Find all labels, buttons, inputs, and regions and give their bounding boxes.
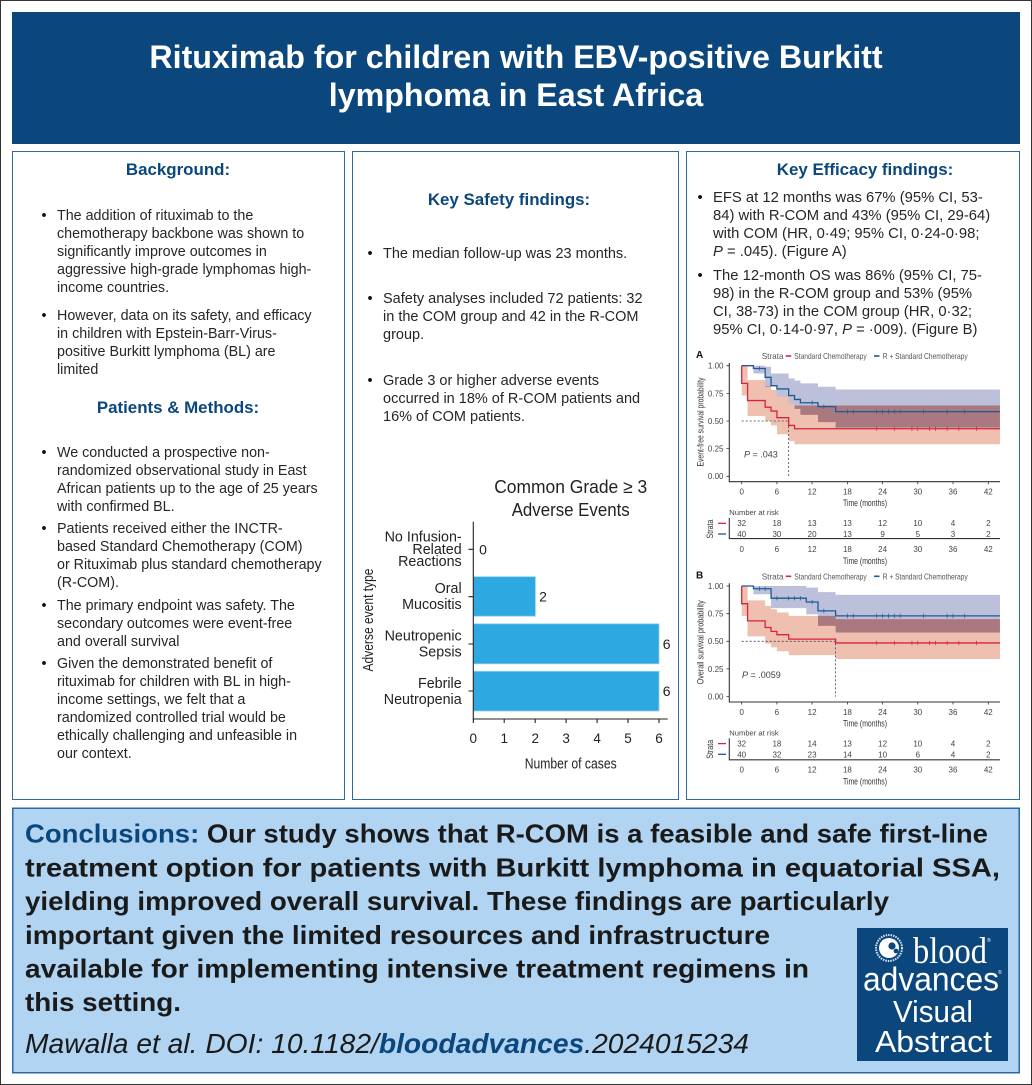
chart B: overall survival: 6: [775, 765, 780, 774]
chart A: event-free survival: [696, 350, 1000, 567]
text: efficacy bullet 1: with COM (HR, 0·49; 95% CI, 0·24-0·98;: [713, 226, 979, 242]
text: methods bullet 2: (R-COM).: [57, 575, 119, 591]
chart A: event-free survival: 2: [986, 530, 991, 539]
title banner: [12, 12, 1020, 144]
chart A: event-free survival: 42: [984, 488, 993, 496]
chart B: overall survival: 42: [984, 765, 993, 774]
bar chart: common grade 3 adverse events: 0: [470, 731, 477, 746]
chart B: overall survival: Overall survival probability: [696, 600, 706, 684]
chart A: event-free survival: 40: [737, 530, 747, 539]
text: methods bullet 4: income settings, we felt that a: [57, 692, 245, 708]
text: safety bullet 1: The median follow-up was 23 months.: [383, 246, 627, 262]
panel: background and methods: [12, 151, 345, 800]
text: efficacy bullet 2: 98) in the R-COM group and 53% (95%: [713, 286, 972, 302]
chart A: event-free survival: 13: [843, 530, 852, 539]
bar chart: common grade 3 adverse events: Oral: [435, 581, 462, 597]
chart A: event-free survival: Time (months): [843, 498, 887, 509]
text: methods bullet 4: [57, 654, 297, 763]
panel: conclusions: Conclusions: Our study shows that R-COM is a feasible and safe first-line: [25, 819, 988, 849]
chart B: overall survival: 6: [775, 708, 780, 717]
text: methods bullet 4: rituximab for children with BL in high-: [57, 674, 291, 690]
survival charts: [696, 350, 1000, 787]
text: methods bullet 2: [57, 520, 322, 592]
chart B: overall survival: 24: [878, 765, 888, 774]
chart B: overall survival: [696, 570, 1000, 787]
chart B: overall survival: Strata: [705, 740, 715, 759]
chart B: overall survival: 0: [739, 765, 744, 774]
chart A: event-free survival: 2: [986, 519, 991, 528]
text: methods bullet 4: randomized controlled trial would be: [57, 710, 286, 726]
text: safety bullet 2: group.: [383, 327, 424, 343]
chart B: overall survival: 2: [986, 739, 991, 748]
chart B: overall survival: 0.75: [708, 610, 724, 619]
chart A: event-free survival: A: [696, 350, 703, 361]
bar chart: common grade 3 adverse events: 5: [624, 731, 632, 746]
chart B: overall survival: 30: [913, 765, 923, 774]
text: background bullet 1: [57, 206, 311, 297]
chart B: overall survival: 40: [737, 750, 747, 759]
text: efficacy bullet 1: [713, 188, 990, 261]
text: methods bullet 4: our context.: [57, 746, 132, 762]
chart B: overall survival: Time (months): [843, 718, 887, 729]
chart A: event-free survival: 12: [808, 545, 817, 554]
chart A: event-free survival: 4: [951, 519, 956, 528]
chart A: event-free survival: 12: [808, 488, 817, 496]
panel: conclusions: [12, 808, 1020, 1074]
chart A: event-free survival: 9: [880, 530, 885, 539]
chart A: event-free survival: 0: [739, 545, 744, 554]
chart A: event-free survival: 10: [913, 519, 923, 528]
bar chart: common grade 3 adverse events: Adverse event type: [360, 568, 377, 672]
logo: blood advances visual abstract: Abstract: [875, 1024, 992, 1059]
chart B: overall survival: 14: [808, 739, 817, 748]
chart A: event-free survival: R + Standard Chemotherapy: [883, 352, 968, 361]
chart A: event-free survival: Number at risk: [729, 508, 779, 517]
chart A: event-free survival: P = .043: [744, 450, 778, 460]
chart A: event-free survival: 36: [949, 488, 958, 496]
chart B: overall survival: 0: [739, 708, 744, 717]
text: background bullet 2: in children with Epstein-Barr-Virus-: [57, 326, 277, 342]
bar chart: common grade 3 adverse events: Reactions: [398, 554, 462, 570]
chart B: overall survival: 18: [843, 708, 852, 717]
bar chart: common grade 3 adverse events: 6: [655, 731, 663, 746]
text: methods bullet 3: The primary endpoint was safety. The: [57, 598, 295, 614]
bar chart: common grade 3 adverse events: Adverse Events: [512, 500, 630, 520]
bar chart: common grade 3 adverse events: 3: [562, 731, 570, 746]
chart A: event-free survival: 1.00: [708, 362, 724, 371]
panel: conclusions: this setting.: [25, 987, 181, 1017]
logo: blood advances visual abstract: Visual: [893, 994, 973, 1029]
chart A: event-free survival: 13: [808, 519, 817, 528]
chart A: event-free survival: 18: [843, 545, 852, 554]
text: background bullet 1: significantly improve outcomes in: [57, 244, 267, 260]
bar chart: common grade 3 adverse events: [360, 477, 671, 772]
title banner: Rituximab for children with EBV-positive Burkitt: [149, 38, 883, 74]
chart A: event-free survival: 13: [843, 519, 852, 528]
chart B: overall survival: 12: [808, 708, 817, 717]
panel: conclusions: yielding improved overall survival. These findings are particularly: [25, 886, 890, 916]
bar chart: common grade 3 adverse events: Sepsis: [419, 644, 462, 660]
text: efficacy bullet 2: 95% CI, 0·14-0·97, P = ·009). (Figure B): [713, 322, 977, 338]
logo: blood advances visual abstract: blood: [913, 931, 987, 972]
chart A: event-free survival: 0.00: [708, 472, 724, 481]
text: methods bullet 2: based Standard Chemotherapy (COM): [57, 539, 303, 555]
panel: key safety findings: [352, 151, 679, 800]
text: safety bullet 2: in the COM group and 42 in the R-COM: [383, 309, 638, 325]
text: background bullet 1: The addition of rituximab to the: [57, 208, 253, 224]
chart B: overall survival: 24: [878, 708, 888, 717]
chart A: event-free survival: Time (months): [843, 556, 887, 567]
bar chart: common grade 3 adverse events: Number of cases: [525, 756, 617, 772]
bar chart: common grade 3 adverse events: 2: [539, 588, 547, 604]
chart B: overall survival: 1.00: [708, 582, 724, 591]
chart B: overall survival: 0.25: [708, 665, 724, 674]
logo: blood advances visual abstract: [857, 928, 1008, 1061]
chart A: event-free survival: 18: [772, 519, 782, 528]
chart B: overall survival: 14: [843, 750, 852, 759]
panel: conclusions: Mawalla et al. DOI: 10.1182/ bloodadvances.2024015234: [25, 1028, 749, 1059]
bar chart: common grade 3 adverse events: 0: [479, 542, 487, 558]
chart B: overall survival: 10: [878, 750, 888, 759]
chart A: event-free survival: 12: [878, 519, 888, 528]
chart B: overall survival: 32: [737, 739, 747, 748]
text: safety bullet 3: occurred in 18% of R-COM patients and: [383, 391, 640, 407]
text: methods bullet 1: African patients up to the age of 25 years: [57, 481, 318, 497]
text: efficacy bullet 2: [713, 266, 982, 339]
chart A: event-free survival: Strata: [705, 520, 715, 538]
chart A: event-free survival: Strata: [762, 352, 784, 361]
chart A: event-free survival: 6: [775, 488, 780, 496]
text: background bullet 2: positive Burkitt lymphoma (BL) are: [57, 344, 276, 360]
text: methods bullet 3: and overall survival: [57, 634, 179, 650]
chart A: event-free survival: 24: [878, 545, 888, 554]
text: safety bullet 2: Safety analyses included 72 patients: 32: [383, 290, 643, 306]
chart B: overall survival: 0.00: [708, 693, 724, 702]
text: methods bullet 4: Given the demonstrated benefit of: [57, 656, 272, 672]
text: methods bullet 3: secondary outcomes were event-free: [57, 616, 292, 632]
text: efficacy bullet 1: 84) with R-COM and 43% (95% CI, 29-64): [713, 208, 990, 224]
chart B: overall survival: 36: [949, 765, 958, 774]
heading: background: Background:: [126, 160, 230, 179]
bar chart: common grade 3 adverse events: No Infusion-: [385, 530, 462, 546]
text: background bullet 2: [57, 306, 312, 379]
bar chart: common grade 3 adverse events: Mucositis: [402, 597, 462, 613]
text: methods bullet 3: [57, 596, 295, 651]
text: efficacy bullet 2: The 12-month OS was 86% (95% CI, 75-: [713, 268, 982, 284]
text: background bullet 2: limited: [57, 362, 98, 378]
bar chart: common grade 3 adverse events: Related: [412, 542, 462, 558]
chart B: overall survival: 4: [951, 739, 956, 748]
bar chart: common grade 3 adverse events: 1: [500, 731, 508, 746]
chart A: event-free survival: 24: [878, 488, 888, 496]
chart B: overall survival: B: [696, 570, 703, 581]
chart B: overall survival: 36: [949, 708, 958, 717]
bar chart: common grade 3 adverse events: 6: [663, 636, 671, 652]
chart B: overall survival: 12: [808, 765, 817, 774]
chart B: overall survival: 42: [984, 708, 993, 717]
chart B: overall survival: 10: [913, 739, 923, 748]
chart A: event-free survival: Event-free survival probability: [696, 377, 706, 466]
chart B: overall survival: 4: [951, 750, 956, 759]
panel: conclusions: important given the limited resources and infrastructure: [25, 920, 770, 950]
chart A: event-free survival: 0.75: [708, 389, 724, 398]
chart A: event-free survival: 30: [913, 488, 923, 496]
heading: key safety findings: Key Safety findings:: [428, 190, 590, 209]
chart B: overall survival: 2: [986, 750, 991, 759]
bar chart: common grade 3 adverse events: 6: [663, 683, 671, 699]
text: safety bullet 3: [383, 372, 640, 426]
chart B: overall survival: 18: [772, 739, 782, 748]
text: efficacy bullet 1: P = .045). (Figure A): [713, 244, 847, 260]
chart A: event-free survival: 3: [951, 530, 956, 539]
chart A: event-free survival: 42: [984, 545, 993, 554]
chart B: overall survival: 30: [913, 708, 923, 717]
text: methods bullet 2: or Rituximab plus standard chemotherapy: [57, 557, 322, 573]
text: efficacy bullet 2: CI, 38-73) in the COM group (HR, 0·32;: [713, 304, 972, 320]
bar chart: common grade 3 adverse events: Febrile: [418, 676, 462, 692]
chart B: overall survival: 32: [772, 750, 782, 759]
text: methods bullet 4: ethically challenging and unfeasible in: [57, 728, 297, 744]
bar chart: common grade 3 adverse events: Neutropenic: [385, 628, 462, 644]
chart B: overall survival: R + Standard Chemotherapy: [883, 572, 968, 581]
chart A: event-free survival: 18: [843, 488, 852, 496]
text: background bullet 2: However, data on its safety, and efficacy: [57, 308, 312, 324]
heading: patients and methods: Patients & Methods:: [97, 398, 259, 417]
bar chart: common grade 3 adverse events: Neutropenia: [384, 692, 462, 708]
chart A: event-free survival: 30: [772, 530, 782, 539]
text: methods bullet 1: randomized observational study in East: [57, 463, 307, 479]
chart B: overall survival: 0.50: [708, 637, 724, 646]
chart A: event-free survival: Standard Chemotherapy: [794, 352, 867, 361]
chart A: event-free survival: 36: [949, 545, 958, 554]
chart B: overall survival: Strata: [762, 572, 784, 581]
chart B: overall survival: P = .0059: [742, 670, 781, 680]
text: methods bullet 1: [57, 444, 318, 516]
panel: conclusions: treatment option for patients with Burkitt lymphoma in equatorial SSA,: [25, 852, 1000, 882]
text: background bullet 1: aggressive high-grade lymphomas high-: [57, 262, 311, 278]
text: methods bullet 1: with confirmed BL.: [57, 499, 175, 515]
text: safety bullet 3: 16% of COM patients.: [383, 409, 525, 425]
panel: conclusions: available for implementing intensive treatment regimens in: [25, 953, 809, 983]
chart A: event-free survival: 0.50: [708, 417, 724, 426]
chart A: event-free survival: 0.25: [708, 444, 724, 454]
bar chart: common grade 3 adverse events: 2: [531, 731, 539, 746]
heading: key efficacy findings: Key Efficacy findings:: [777, 160, 953, 179]
chart B: overall survival: 13: [843, 739, 852, 748]
text: efficacy bullet 1: EFS at 12 months was 67% (95% CI, 53-: [713, 190, 983, 206]
text: safety bullet 3: Grade 3 or higher adverse events: [383, 372, 599, 388]
chart B: overall survival: Time (months): [843, 776, 887, 787]
chart B: overall survival: Standard Chemotherapy: [794, 572, 867, 581]
text: methods bullet 1: We conducted a prospective non-: [57, 444, 270, 460]
text: background bullet 1: income countries.: [57, 280, 169, 296]
title banner: lymphoma in East Africa: [329, 77, 703, 113]
chart B: overall survival: Number at risk: [729, 728, 779, 737]
chart B: overall survival: 12: [878, 739, 888, 748]
text: methods bullet 2: Patients received either the INCTR-: [57, 520, 283, 536]
panel: key efficacy findings: [686, 151, 1020, 800]
chart B: overall survival: 6: [916, 750, 921, 759]
logo: blood advances visual abstract: ®: [998, 969, 1002, 976]
chart B: overall survival: 23: [808, 750, 817, 759]
chart A: event-free survival: 20: [808, 530, 817, 539]
chart A: event-free survival: 30: [913, 545, 923, 554]
chart A: event-free survival: 32: [737, 519, 747, 528]
chart A: event-free survival: 6: [775, 545, 780, 554]
chart A: event-free survival: 5: [916, 530, 921, 539]
logo: blood advances visual abstract: ®: [987, 937, 991, 944]
text: safety bullet 2: [383, 290, 643, 344]
text: background bullet 1: chemotherapy backbone was shown to: [57, 226, 304, 242]
bar chart: common grade 3 adverse events: 4: [593, 731, 601, 746]
chart A: event-free survival: 0: [739, 488, 744, 496]
bar chart: common grade 3 adverse events: Common Grade ≥ 3: [494, 477, 647, 497]
logo: blood advances visual abstract: advances: [863, 960, 999, 998]
chart B: overall survival: 18: [843, 765, 852, 774]
